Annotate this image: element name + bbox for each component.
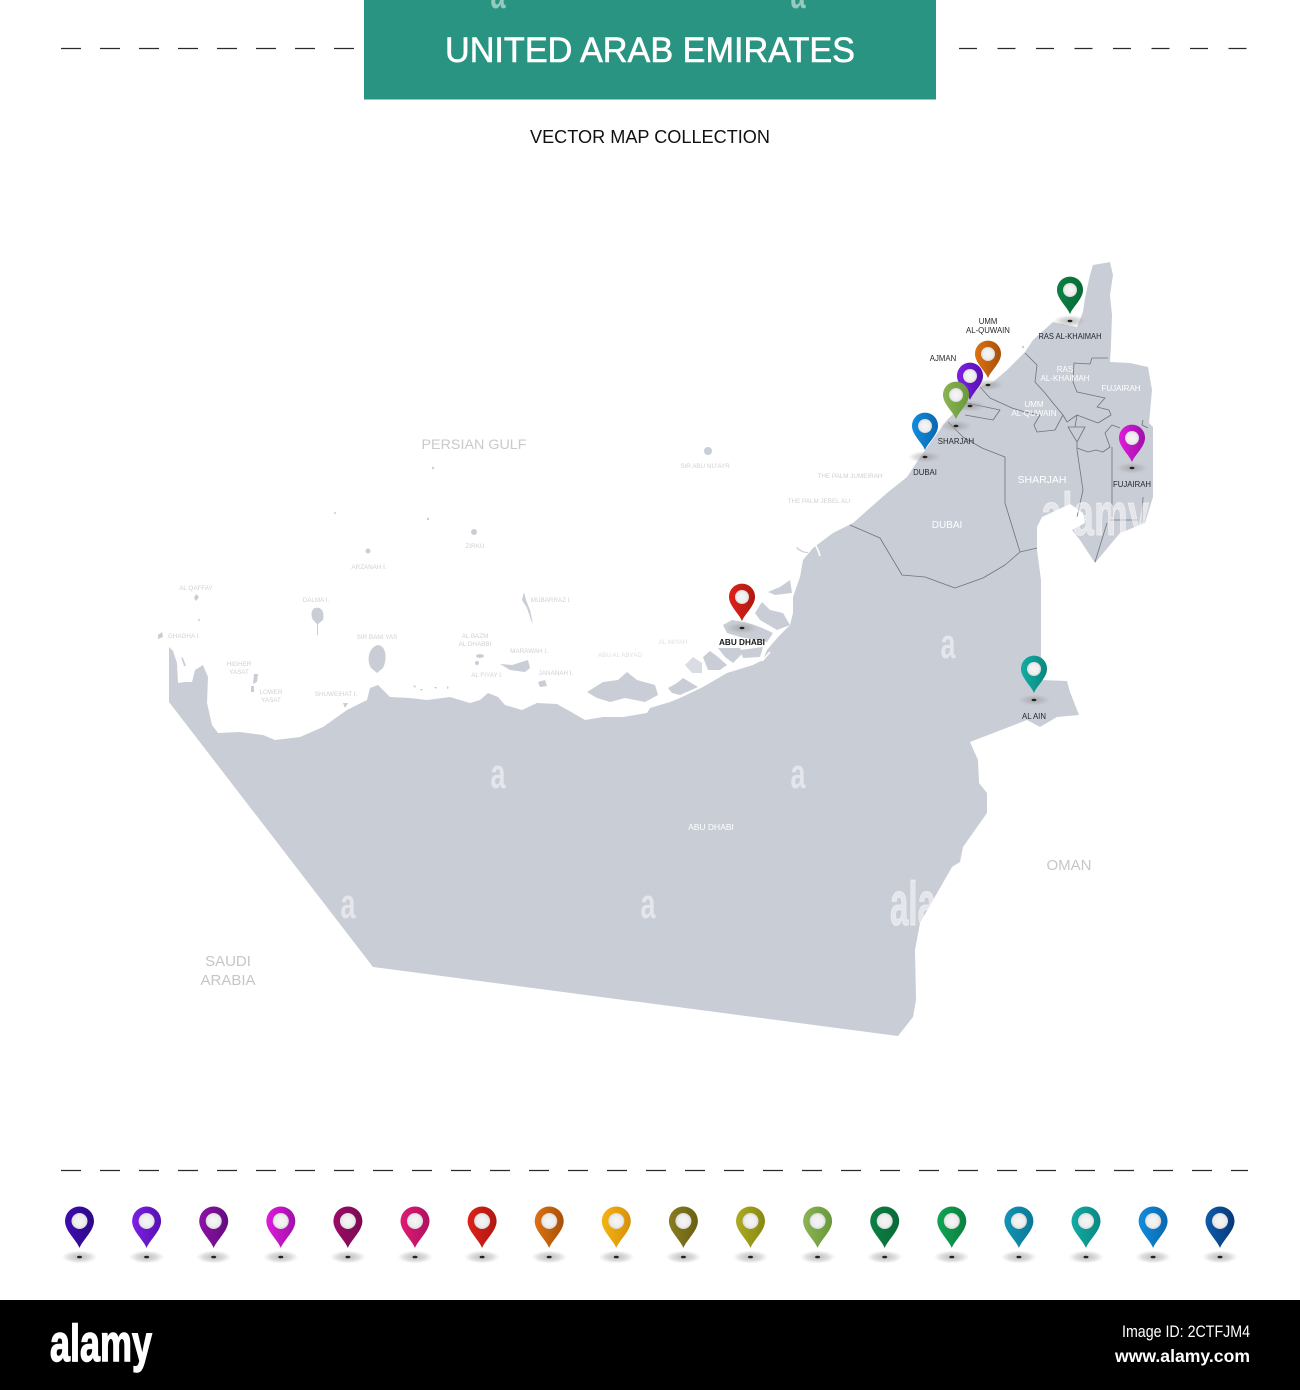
sea and island labels: HIGHER [227,661,252,668]
pin: Fujairah: FUJAIRAH [1113,480,1151,489]
sea and island labels: SIR BANI YAS [357,634,397,641]
image id: Image ID: 2CTFJM4 [1122,1322,1250,1341]
watermarks over the map: ala [890,870,936,939]
subtitle: VECTOR MAP COLLECTION [530,126,770,147]
sea and island labels: LOWER [259,689,283,696]
emirate names: RAS [1057,365,1073,374]
pin: Ajman [930,354,987,412]
sea and island labels: SHUWEIHAT I. [315,691,357,698]
pin: Umm Al-Quwain: UMM [979,317,997,326]
pin: Sharjah: SHARJAH [938,437,974,446]
watermarks over the map: a [640,880,656,927]
legend pin 16 [1068,1206,1104,1264]
neighbouring country labels: OMAN [1046,857,1092,874]
legend pin 11 [732,1206,768,1264]
pin: Ras Al-Khaimah: RAS AL-KHAIMAH [1038,332,1102,341]
pin: Al Ain [1017,656,1051,721]
bottom dashed rule [61,1170,1248,1172]
legend pin 10 [665,1206,701,1264]
emirate names: SHARJAH [1017,474,1067,486]
pin: Umm Al-Quwain: AL-QUWAIN [966,326,1010,335]
pin: Umm Al-Quwain [966,317,1010,391]
pin: Al Ain: AL AIN [1022,712,1046,721]
legend pin 7 [464,1206,500,1264]
watermarks over the map: a [490,750,506,797]
legend pin 12 [800,1206,836,1264]
sea and island labels: YASAT [261,697,281,704]
legend pin 18 [1202,1206,1238,1264]
sea and island labels: ARZANAH I. [351,564,387,571]
pin colour legend [62,1206,1238,1264]
pin: Dubai [908,413,942,477]
sea and island labels: DALMA I. [303,597,330,604]
pin: Dubai: DUBAI [913,468,937,477]
pin: Sharjah [938,382,974,446]
watermarks over the map [340,481,1149,939]
sea and island labels: MUBARRAZ I. [531,597,572,604]
emirate names: FUJAIRAH [1101,384,1141,393]
sea and island labels: AL QAFFAY [179,585,214,592]
sea and island labels: AL FIYAY I. [471,672,503,679]
sea and island labels: GHAGHA I. [168,633,200,640]
pin: Ras Al-Khaimah [1038,277,1102,341]
footer bar [0,1300,1300,1390]
legend pin 6 [397,1206,433,1264]
neighbouring country labels: ARABIA [200,972,256,989]
sea and island labels: YASAT [229,669,249,676]
top dashed rule [61,48,1248,50]
mainland [169,262,1153,1036]
neighbouring country labels: SAUDI [205,953,251,970]
sea and island labels: THE PALM JUMEIRAH [818,473,883,480]
sea and island labels: MARAWAH I. [510,648,548,655]
pin: Fujairah [1113,425,1151,489]
sea and island labels [168,436,883,704]
emirate borders [850,353,1148,588]
legend pin 3 [196,1206,232,1264]
sea and island labels: AL DHABBI [459,641,492,648]
legend pin 9 [598,1206,634,1264]
website: www.alamy.com [1114,1346,1250,1366]
coastal islands near Abu Dhabi [158,346,1024,713]
emirate names: AL-KHAIMAH [1041,374,1090,383]
emirate names: UMM [1024,400,1044,409]
footer logo: alamy [50,1315,152,1373]
legend pin 15 [1001,1206,1037,1264]
sea and island labels: AL MIYAH [659,639,688,646]
legend pin 14 [934,1206,970,1264]
emirate names: ABU DHABI [688,822,734,832]
emirate names [688,365,1141,832]
coastal inlets [762,352,1021,661]
pin: Abu Dhabi: ABU DHABI [719,638,765,647]
emirate names: DUBAI [932,520,962,531]
legend pin 5 [330,1206,366,1264]
sea and island labels: ZIRKU [466,543,485,550]
map of the UAE [158,262,1153,1036]
pin: Abu Dhabi [719,584,765,647]
watermarks over the map: a [340,880,356,927]
watermarks over the map: a [940,620,956,667]
sea and island labels: AL BAZM [462,633,488,640]
legend pin 13 [867,1206,903,1264]
watermarks over the map: alamy [1041,481,1149,548]
legend pin 8 [531,1206,567,1264]
sea and island labels: JANANAH I. [539,670,574,677]
legend pin 4 [263,1206,299,1264]
title banner [364,0,936,100]
sea and island labels: PERSIAN GULF [422,436,526,452]
sea and island labels: THE PALM JEBEL ALI [788,498,851,505]
legend pin 2 [129,1206,165,1264]
sea and island labels: ABU AL ABYAD [598,652,642,659]
watermarks over the map: a [790,750,806,797]
pin: Ajman: AJMAN [930,354,956,363]
emirate names: AL-QUWAIN [1011,409,1057,418]
sea and island labels: SIR ABU NU'AYR [680,463,730,470]
legend pin 1 [62,1206,98,1264]
neighbouring country labels [200,857,1092,989]
legend pin 17 [1135,1206,1171,1264]
title banner: UNITED ARAB EMIRATES [445,31,855,70]
